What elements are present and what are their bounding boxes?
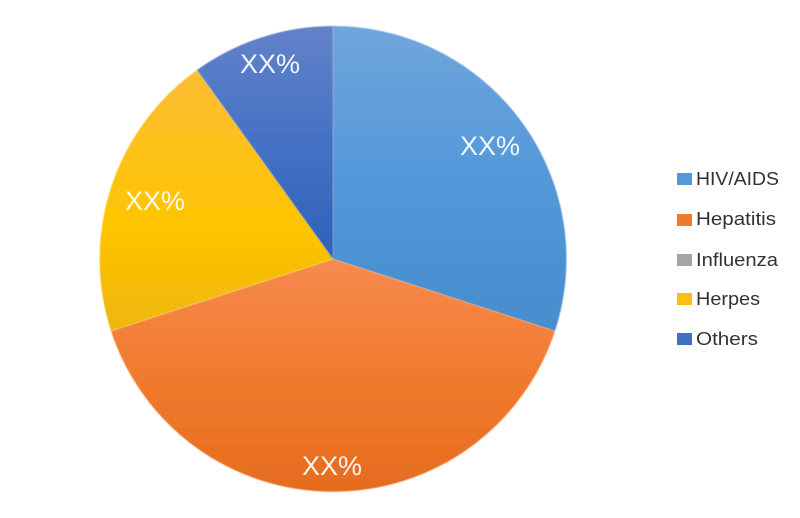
value label: Herpes: XX% xyxy=(125,186,185,216)
legend item: Others xyxy=(677,329,758,349)
value label: Others: XX% xyxy=(240,49,300,79)
legend item: Herpes: Herpes xyxy=(696,289,760,309)
slice: Hepatitis xyxy=(111,259,555,492)
legend xyxy=(677,169,779,349)
pie chart xyxy=(100,26,566,492)
legend item: Influenza: Influenza xyxy=(696,250,779,270)
legend item: Others: Others xyxy=(696,329,758,349)
slice: HIV/AIDS xyxy=(333,26,566,331)
slice: Herpes xyxy=(100,70,333,331)
slice: Others xyxy=(197,26,333,259)
value label: Hepatitis: XX% xyxy=(302,451,362,481)
legend item: Hepatitis: Hepatitis xyxy=(696,209,776,229)
legend item: Herpes xyxy=(677,289,760,309)
legend item: HIV/AIDS: HIV/AIDS xyxy=(696,169,779,189)
value label: HIV/AIDS: XX% xyxy=(460,131,520,161)
